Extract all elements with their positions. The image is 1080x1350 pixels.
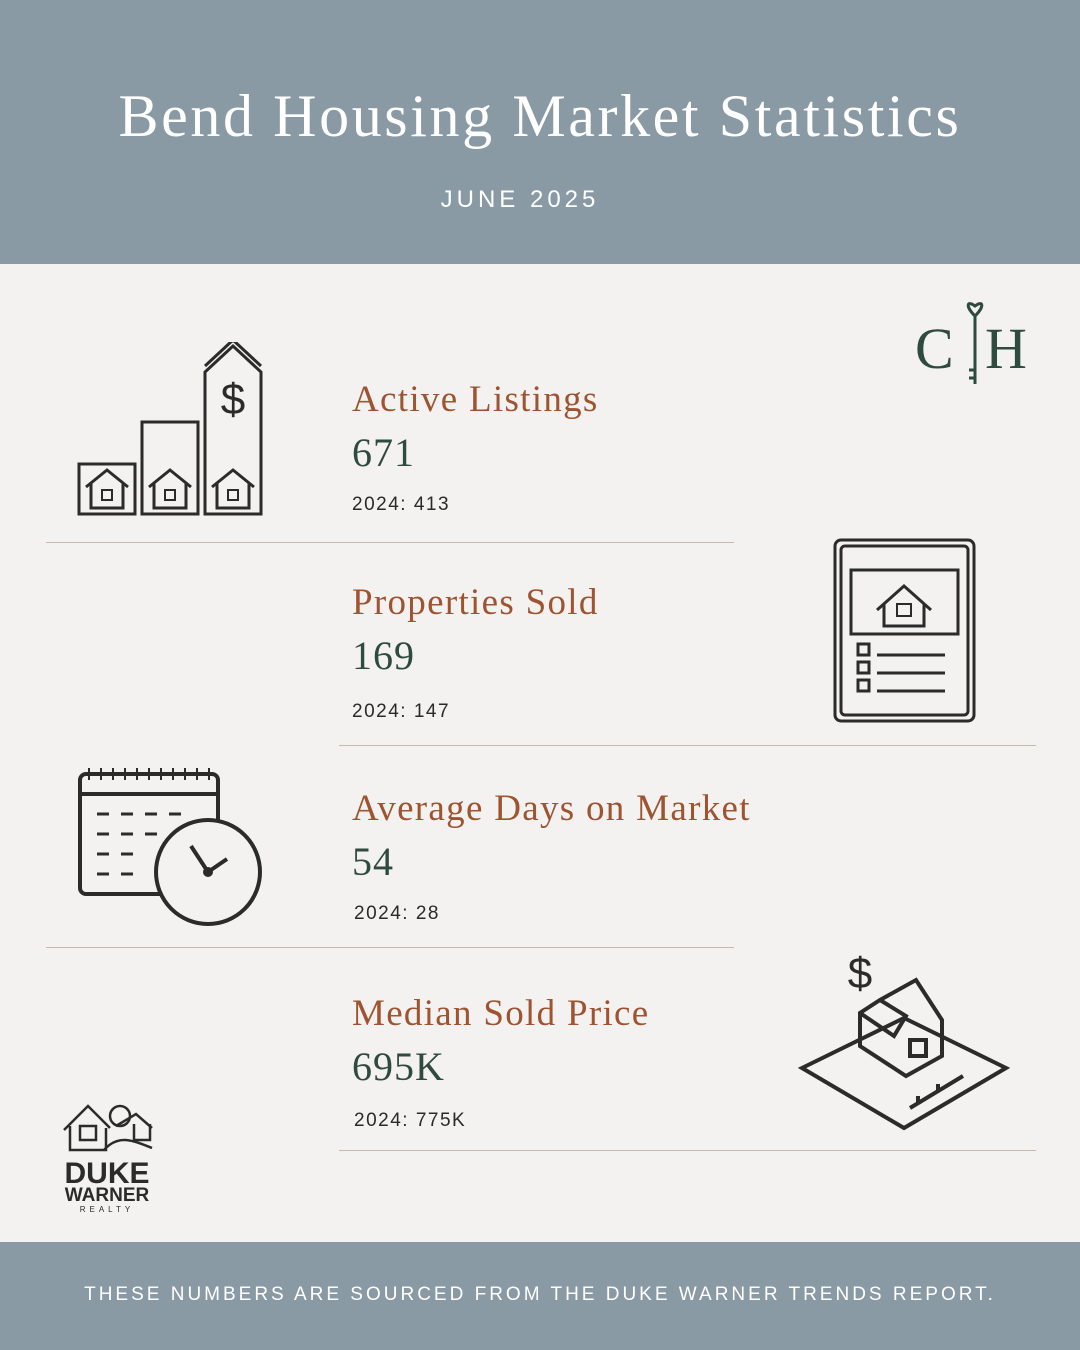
- stat: Median Sold Price: Median Sold Price: [352, 993, 650, 1034]
- stat: Active Listings: Active Listings: [352, 379, 599, 420]
- footer text: THESE NUMBERS ARE SOURCED FROM THE DUKE WARNER TRENDS REPORT.: [84, 1284, 996, 1305]
- subtitle: JUNE 2025: [441, 186, 599, 213]
- logo: Duke Warner Realty: WARNER: [65, 1185, 149, 1206]
- stat: Active Listings: [352, 379, 599, 515]
- stat: Active Listings: 2024: 413: [352, 494, 450, 515]
- stat: Properties Sold: [352, 582, 599, 722]
- stat: Properties Sold: 169: [352, 633, 415, 678]
- icon: listing tablet: [834, 538, 976, 722]
- stat: Median Sold Price: 2024: 775K: [354, 1110, 466, 1131]
- stat: Average Days on Market: 2024: 28: [354, 903, 440, 924]
- stat: Properties Sold: Properties Sold: [352, 582, 599, 623]
- stat: Median Sold Price: [352, 993, 650, 1131]
- stat: Average Days on Market: [352, 788, 751, 924]
- logo: Duke Warner Realty: [63, 1104, 153, 1214]
- stat: Active Listings: 671: [352, 430, 415, 475]
- logo: CH key: [915, 302, 1027, 384]
- stat: Average Days on Market: 54: [352, 839, 394, 884]
- icon: house on lot with dollar: $: [848, 949, 872, 998]
- footer band: [0, 1242, 1080, 1350]
- title: Bend Housing Market Statistics: [119, 83, 961, 149]
- logo: Duke Warner Realty: DUKE: [64, 1157, 150, 1190]
- icon: growing houses bar chart: [78, 342, 262, 516]
- stat: Median Sold Price: 695K: [352, 1044, 445, 1089]
- icon: growing houses bar chart: $: [221, 375, 245, 424]
- stat: Properties Sold: 2024: 147: [352, 701, 450, 722]
- header band: [0, 0, 1080, 264]
- logo: Duke Warner Realty: REALTY: [80, 1205, 134, 1214]
- logo: CH key: H: [985, 316, 1027, 381]
- logo: CH key: C: [915, 316, 954, 381]
- stat: Average Days on Market: Average Days on Market: [352, 788, 751, 829]
- icon: house on lot with dollar: [798, 949, 1010, 1130]
- icon: calendar with clock: [78, 768, 262, 926]
